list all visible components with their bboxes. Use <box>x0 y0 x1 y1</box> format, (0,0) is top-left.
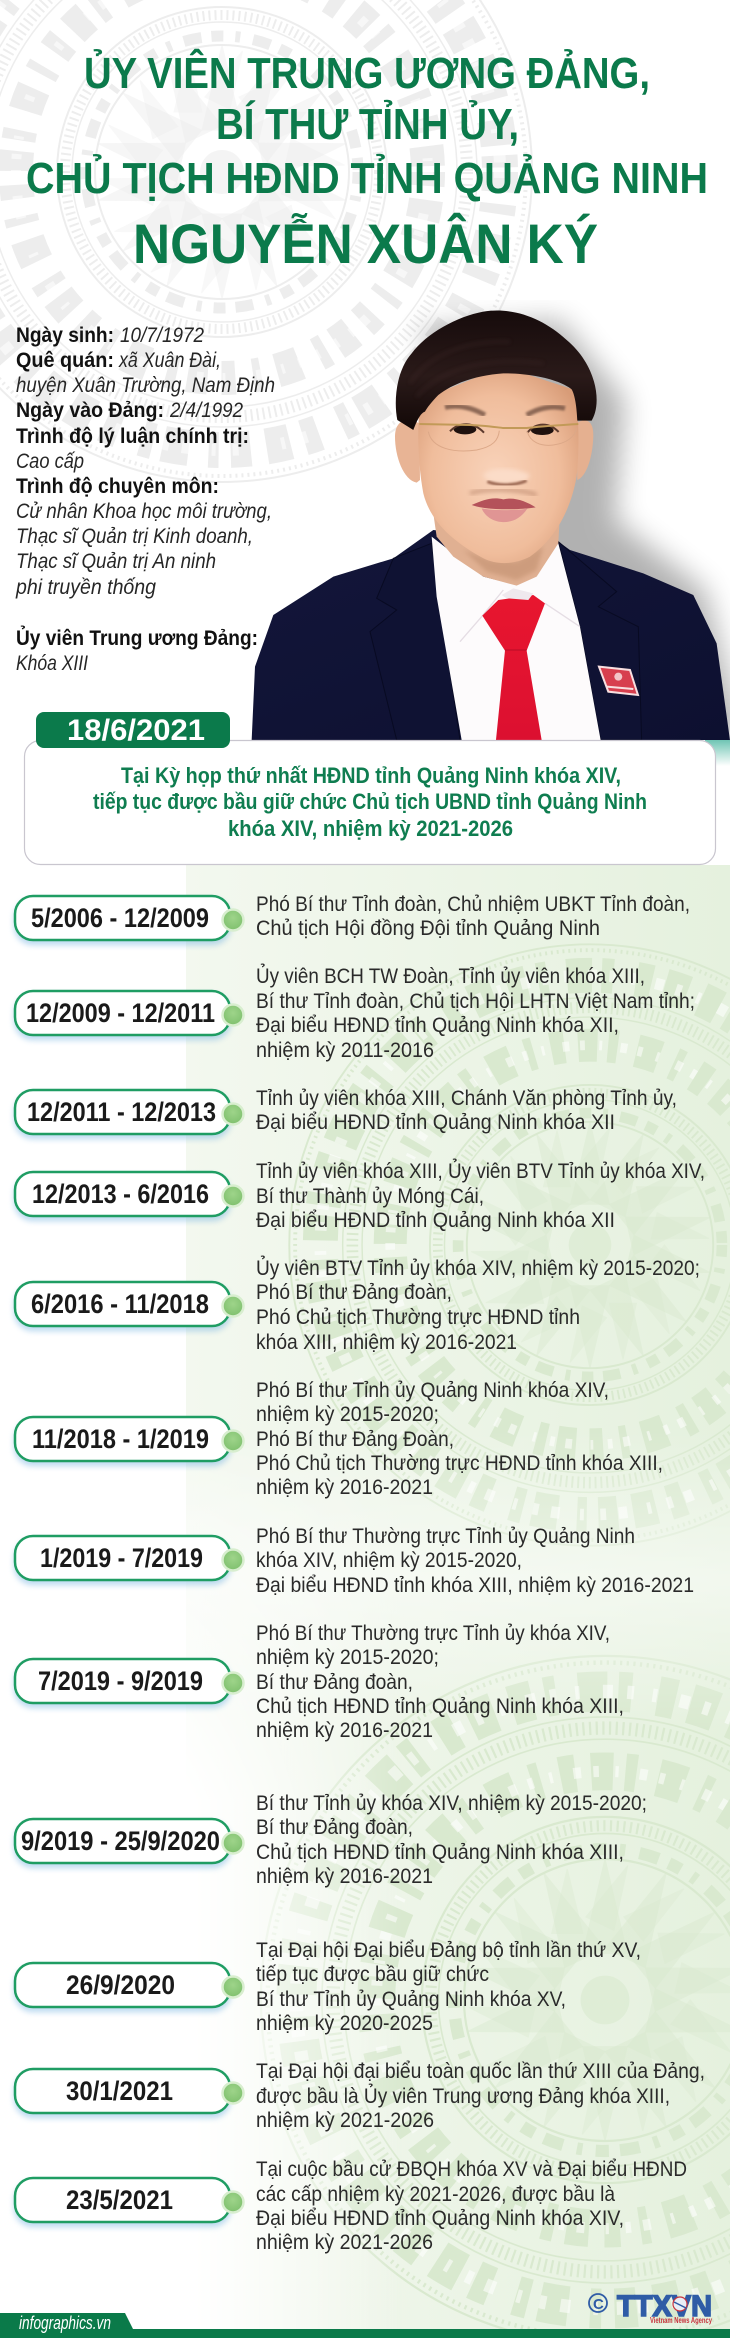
date pill: 12/2011 - 12/2013 <box>27 1097 216 1127</box>
title: ỦY VIÊN TRUNG ƯƠNG ĐẢNG, <box>84 47 650 98</box>
eyes <box>454 424 476 434</box>
card text <box>93 763 647 841</box>
timeline entry 2 <box>15 964 695 1062</box>
description: Bí thư Tỉnh ủy Quảng Ninh khóa XV, <box>256 1988 566 2011</box>
portrait shadow <box>420 320 730 740</box>
description: Đại biểu HĐND tỉnh Quảng Ninh khóa XIV, <box>256 2207 624 2230</box>
personal information: phi truyền thống <box>15 576 156 599</box>
description: được bầu là Ủy viên Trung ương Đảng khóa XIII, <box>256 2084 670 2108</box>
timeline entry 6 <box>15 1379 663 1499</box>
description: Tại Đại hội đại biểu toàn quốc lần thứ XIII của Đảng, <box>256 2060 705 2083</box>
description: Phó Bí thư Tỉnh ủy Quảng Ninh khóa XIV, <box>256 1379 609 1402</box>
nose <box>483 469 530 484</box>
date pill <box>15 1417 230 1461</box>
face <box>418 367 578 563</box>
description <box>256 1159 705 1232</box>
description: Bí thư Tỉnh đoàn, Chủ tịch Hội LHTN Việt Nam tỉnh; <box>256 990 695 1013</box>
description: Phó Bí thư Thường trực Tỉnh ủy Quảng Ninh <box>256 1525 635 1548</box>
description: Phó Bí thư Đảng Đoàn, <box>256 1428 454 1451</box>
date pill: 12/2013 - 6/2016 <box>32 1179 209 1209</box>
description: Phó Bí thư Tỉnh đoàn, Chủ nhiệm UBKT Tỉnh đoàn, <box>256 893 690 916</box>
date pill <box>15 1172 230 1216</box>
marker dot <box>222 1104 244 1124</box>
description: Phó Bí thư Thường trực Tỉnh ủy khóa XIV, <box>256 1622 610 1645</box>
portrait photo <box>252 311 730 740</box>
personal information: Cử nhân Khoa học môi trường, <box>16 500 272 523</box>
highlighted date panel <box>24 712 716 864</box>
description <box>256 1256 700 1354</box>
marker dot <box>222 2192 244 2212</box>
description: Tại cuộc bầu cử ĐBQH khóa XV và Đại biểu HĐND <box>256 2158 687 2181</box>
card text: Tại Kỳ họp thứ nhất HĐND tỉnh Quảng Ninh khóa XIV, <box>121 763 621 788</box>
personal information: Quê quán: <box>16 349 114 372</box>
description <box>256 2158 687 2254</box>
personal information: huyện Xuân Trường, Nam Định <box>16 374 275 397</box>
date pill <box>15 1090 230 1134</box>
description: Phó Chủ tịch Thường trực HĐND tỉnh <box>256 1306 580 1329</box>
description <box>256 964 695 1062</box>
description <box>256 1379 663 1499</box>
personal information <box>15 324 275 675</box>
description <box>256 1792 647 1888</box>
description: Chủ tịch Hội đồng Đội tỉnh Quảng Ninh <box>256 917 600 940</box>
title <box>26 47 708 275</box>
description: Đại biểu HĐND tỉnh Quảng Ninh khóa XII <box>256 1209 615 1232</box>
description <box>256 1087 677 1134</box>
description <box>256 1939 641 2035</box>
description: Đại biểu HĐND tỉnh Quảng Ninh khóa XII <box>256 1111 615 1134</box>
date pill <box>15 1819 230 1863</box>
shirt <box>432 537 601 740</box>
description <box>256 1622 624 1742</box>
date pill: 7/2019 - 9/2019 <box>38 1666 203 1696</box>
description: nhiệm kỳ 2021-2026 <box>256 2231 433 2254</box>
description: nhiệm kỳ 2016-2021 <box>256 1476 433 1499</box>
date pill <box>15 896 230 940</box>
description: nhiệm kỳ 2016-2021 <box>256 1865 433 1888</box>
card text: tiếp tục được bầu giữ chức Chủ tịch UBND tỉnh Quảng Ninh <box>93 789 647 814</box>
timeline entry 7 <box>15 1525 694 1597</box>
party badge <box>599 667 638 695</box>
hair <box>396 311 597 430</box>
description: Chủ tịch HĐND tỉnh Quảng Ninh khóa XIII, <box>256 1695 624 1718</box>
footer bar <box>0 2313 730 2338</box>
description: Bí thư Thành ủy Móng Cái, <box>256 1185 484 1208</box>
date tab: 18/6/2021 <box>36 712 230 748</box>
date pill: 9/2019 - 25/9/2020 <box>21 1826 220 1856</box>
marker dot <box>222 910 244 930</box>
date tab: 18/6/2021: 18/6/2021 <box>67 714 205 747</box>
head <box>395 311 597 563</box>
timeline entry 5 <box>15 1256 700 1354</box>
description: nhiệm kỳ 2020-2025 <box>256 2012 433 2035</box>
eyebrows <box>445 406 565 415</box>
date pill: 6/2016 - 11/2018 <box>31 1289 209 1319</box>
personal information: 2/4/1992 <box>169 399 243 422</box>
description <box>256 1525 694 1597</box>
marker dot <box>222 2082 244 2104</box>
date pill <box>15 991 230 1035</box>
date pill <box>15 1282 230 1326</box>
marker dot <box>222 1550 244 1570</box>
ears <box>395 420 420 483</box>
personal information: Khóa XIII <box>16 652 88 675</box>
date pill: 12/2009 - 12/2011 <box>26 998 215 1028</box>
date pill: 26/9/2020 <box>66 1970 175 2000</box>
description: Phó Bí thư Đảng đoàn, <box>256 1281 452 1304</box>
description: khóa XIV, nhiệm kỳ 2015-2020, <box>256 1549 522 1572</box>
date pill: 11/2018 - 1/2019 <box>32 1424 209 1454</box>
card body <box>24 740 716 864</box>
marker dot <box>222 1976 244 1998</box>
wordmark: TTXVN <box>617 2290 712 2323</box>
date pill <box>15 1963 230 2007</box>
personal information: 10/7/1972 <box>120 324 204 347</box>
description <box>256 893 690 940</box>
description: nhiệm kỳ 2015-2020; <box>256 1403 439 1426</box>
date pill <box>15 2069 230 2113</box>
date pill: 1/2019 - 7/2019 <box>40 1543 203 1573</box>
marker dot <box>222 1296 244 1316</box>
logo: TTXVN <box>589 2290 712 2325</box>
personal information: Ngày vào Đảng: <box>16 399 164 422</box>
timeline entry 10 <box>15 1939 641 2035</box>
marker dot <box>222 1430 244 1452</box>
mouth <box>472 498 536 509</box>
personal information: Thạc sĩ Quản trị An ninh <box>16 550 216 573</box>
description: Đại biểu HĐND tỉnh khóa XIII, nhiệm kỳ 2016-2021 <box>256 1574 694 1597</box>
date pill: 23/5/2021 <box>66 2185 173 2215</box>
date pill: 30/1/2021 <box>66 2076 173 2106</box>
background: grey bronze drum <box>0 0 532 482</box>
personal information: Ngày sinh: <box>16 324 114 347</box>
personal information: Trình độ lý luận chính trị: <box>16 425 249 448</box>
title: BÍ THƯ TỈNH ỦY, <box>216 98 519 149</box>
date pill <box>15 2178 230 2222</box>
glasses <box>419 424 578 428</box>
date pill <box>15 1536 230 1580</box>
date pill <box>15 1659 230 1703</box>
description: các cấp nhiệm kỳ 2021-2026, được bầu là <box>256 2183 615 2206</box>
description: khóa XIII, nhiệm kỳ 2016-2021 <box>256 1331 517 1354</box>
marker dot <box>222 1186 244 1206</box>
timeline entry 3 <box>15 1087 677 1134</box>
description: Bí thư Đảng đoàn, <box>256 1671 413 1694</box>
personal information: Trình độ chuyên môn: <box>16 475 219 498</box>
suit jacket <box>252 513 730 740</box>
description: Tại Đại hội Đại biểu Đảng bộ tỉnh lần thứ XV, <box>256 1939 641 1962</box>
timeline entry 1 <box>15 893 690 940</box>
timeline entry 12 <box>15 2158 687 2254</box>
marker dot <box>222 1832 244 1854</box>
description: tiếp tục được bầu giữ chức <box>256 1963 489 1986</box>
card text: khóa XIV, nhiệm kỳ 2021-2026 <box>228 816 513 841</box>
timeline entry 8 <box>15 1622 624 1742</box>
background: green panel with drums <box>186 865 730 2338</box>
timeline entry 9 <box>15 1792 647 1888</box>
necktie <box>482 595 545 740</box>
description: Bí thư Đảng đoàn, <box>256 1816 413 1839</box>
description: Bí thư Tỉnh ủy khóa XIV, nhiệm kỳ 2015-2020; <box>256 1792 647 1815</box>
description: Đại biểu HĐND tỉnh Quảng Ninh khóa XII, <box>256 1014 619 1037</box>
description: Ủy viên BTV Tỉnh ủy khóa XIV, nhiệm kỳ 2015-2020; <box>256 1256 700 1280</box>
timeline entry 11 <box>15 2060 705 2132</box>
personal information: xã Xuân Đài, <box>118 349 221 372</box>
globe mark <box>673 2297 687 2311</box>
site name: infographics.vn <box>19 2313 111 2333</box>
description: Chủ tịch HĐND tỉnh Quảng Ninh khóa XIII, <box>256 1841 624 1864</box>
description: Tỉnh ủy viên khóa XIII, Chánh Văn phòng Tỉnh ủy, <box>256 1087 677 1110</box>
description: nhiệm kỳ 2021-2026 <box>256 2109 434 2132</box>
copyright mark: C <box>593 2296 604 2313</box>
description: Ủy viên BCH TW Đoàn, Tỉnh ủy viên khóa XIII, <box>256 964 645 988</box>
personal information: Thạc sĩ Quản trị Kinh doanh, <box>16 525 253 548</box>
marker dot <box>222 1672 244 1694</box>
title: NGUYỄN XUÂN KÝ <box>133 212 598 275</box>
marker dot <box>222 1004 244 1026</box>
description: nhiệm kỳ 2016-2021 <box>256 1719 433 1742</box>
description: nhiệm kỳ 2011-2016 <box>256 1039 434 1062</box>
date pill: 5/2006 - 12/2009 <box>31 903 209 933</box>
description: Phó Chủ tịch Thường trực HĐND tỉnh khóa XIII, <box>256 1452 663 1475</box>
personal information: Cao cấp <box>16 450 84 473</box>
description <box>256 2060 705 2132</box>
description: nhiệm kỳ 2015-2020; <box>256 1646 439 1669</box>
corner accent behind card <box>705 740 730 766</box>
timeline entry 4 <box>15 1159 705 1232</box>
neck <box>433 513 560 586</box>
personal information: Ủy viên Trung ương Đảng: <box>16 626 258 650</box>
